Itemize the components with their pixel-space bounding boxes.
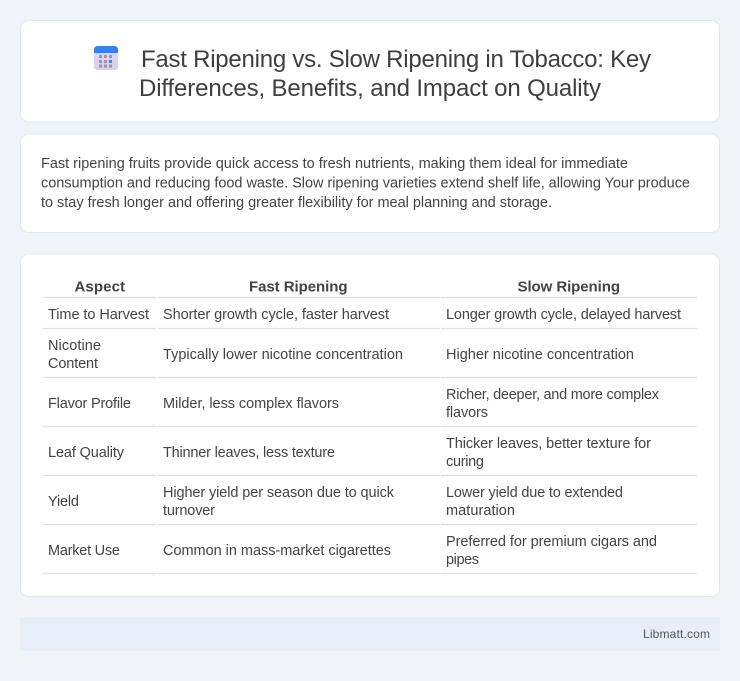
row: nicotine content [48, 338, 634, 372]
intro text: to stay fresh longer and offering greater flexibility for meal planning and storage. [41, 195, 552, 211]
row: market use: pipes [446, 552, 479, 568]
row: yield [48, 485, 623, 519]
row: yield: Yield [48, 494, 79, 510]
row: nicotine content: Nicotine [48, 338, 101, 354]
title: Fast Ripening vs. Slow Ripening in Tobacco: Key [141, 46, 651, 73]
row: market use [48, 534, 657, 568]
row: nicotine content: Typically lower nicotine concentration [163, 347, 403, 363]
icon: calendar [94, 46, 118, 70]
panel: comparison table [20, 254, 720, 596]
row: market use: Common in mass-market cigarettes [163, 543, 391, 559]
row: time to harvest: Time to Harvest [48, 307, 149, 323]
row: leaf quality [48, 436, 651, 470]
row: flavor profile [48, 387, 660, 421]
intro text [41, 156, 690, 211]
row: yield: Lower yield due to extended [446, 485, 623, 501]
panel: intro [20, 134, 720, 232]
row: yield: Higher yield per season due to quick [163, 485, 395, 501]
row: leaf quality: Thicker leaves, better texture for [446, 436, 651, 452]
title: Differences, Benefits, and Impact on Quality [139, 75, 601, 102]
row: nicotine content: Content [48, 356, 98, 372]
table header [74, 278, 620, 296]
row: yield: maturation [446, 503, 515, 519]
title [139, 46, 651, 102]
row: flavor profile: Richer, deeper, and more complex [446, 387, 660, 403]
footer: Libmatt.com [643, 627, 710, 641]
row: market use: Preferred for premium cigars and [446, 534, 657, 550]
row: time to harvest: Longer growth cycle, delayed harvest [446, 307, 681, 323]
row: time to harvest [48, 307, 681, 323]
table header: Fast Ripening [249, 278, 348, 296]
table header: Slow Ripening [518, 278, 620, 296]
intro text: consumption and reducing food waste. Slow ripening varieties extend shelf life, allowing Your produce [41, 176, 690, 192]
row: leaf quality: curing [446, 454, 484, 470]
row: nicotine content: Higher nicotine concentration [446, 347, 634, 363]
table header: Aspect [74, 278, 125, 296]
row: leaf quality: Leaf Quality [48, 445, 125, 461]
row: time to harvest: Shorter growth cycle, faster harvest [163, 307, 389, 323]
row: leaf quality: Thinner leaves, less texture [163, 445, 335, 461]
row: flavor profile: Flavor Profile [48, 396, 131, 412]
footer [20, 617, 720, 651]
row: flavor profile: Milder, less complex flavors [163, 396, 339, 412]
row: market use: Market Use [48, 543, 120, 559]
row: flavor profile: flavors [446, 405, 488, 421]
intro text: Fast ripening fruits provide quick access to fresh nutrients, making them ideal for immediate [41, 156, 628, 172]
panel: title card [20, 20, 720, 122]
row: yield: turnover [163, 503, 215, 519]
